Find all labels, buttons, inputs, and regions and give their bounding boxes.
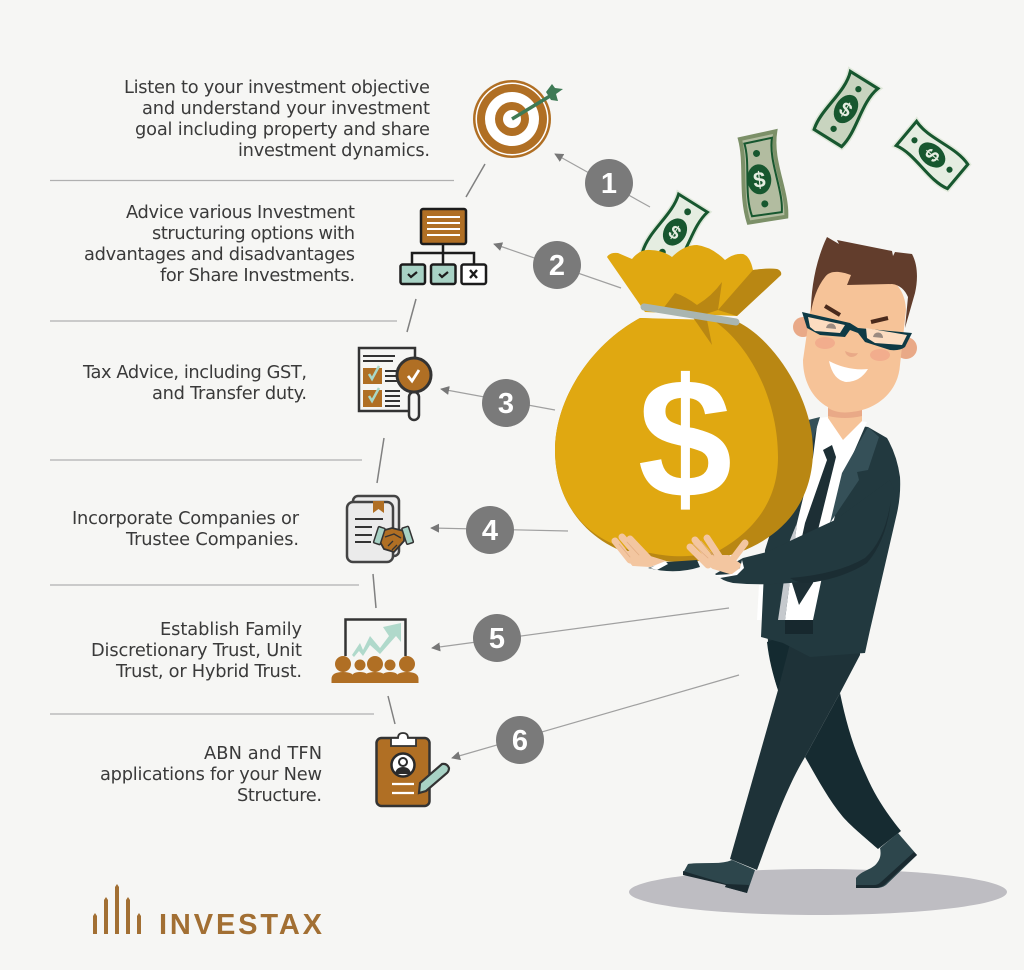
jacket — [761, 420, 900, 657]
bag lower fold shadow — [692, 316, 712, 345]
icon: clipboard with pencil — [376, 733, 449, 806]
text block 2 — [84, 202, 355, 286]
number badge 6 — [496, 716, 544, 764]
text block 6: Structure. — [237, 785, 322, 806]
flying banknote 3 — [813, 71, 879, 147]
right lapel — [830, 427, 879, 523]
flying banknote 3: $ — [835, 98, 856, 122]
shirt sliver — [757, 585, 765, 620]
eyebrows — [825, 306, 888, 322]
text block 1 — [124, 77, 430, 161]
arrow 6 — [452, 675, 739, 758]
text block 4: Incorporate Companies or — [72, 508, 300, 529]
icon: decision tree — [400, 209, 486, 284]
icon: target with arrow — [473, 80, 563, 158]
tie — [792, 445, 836, 605]
bag neck flare — [607, 245, 781, 316]
icon: checklist with magnifier — [359, 348, 431, 420]
flying banknote 2: $ — [752, 167, 767, 193]
nose — [845, 351, 858, 357]
flying banknote 1 — [641, 193, 709, 271]
illustration: money bag — [555, 245, 813, 562]
face — [803, 268, 906, 412]
back leg — [805, 693, 901, 849]
shirt — [785, 417, 867, 620]
number badge 6: 6 — [512, 725, 528, 757]
number badge 5: 5 — [489, 623, 505, 655]
number badge 4: 4 — [482, 515, 498, 547]
text block 2: structuring options with — [152, 223, 355, 244]
number badge 5 — [473, 614, 521, 662]
number badge 2: 2 — [549, 250, 565, 282]
text block 1: and understand your investment — [142, 98, 430, 119]
dollar sign: $ — [638, 344, 732, 534]
logo: Investax — [93, 884, 323, 941]
right hand — [690, 538, 745, 574]
text block 3: Tax Advice, including GST, — [82, 362, 307, 383]
number badge 1: 1 — [601, 168, 617, 200]
illustration: ground shadow — [629, 869, 1007, 915]
arrow 4 — [431, 528, 568, 531]
bag rope — [644, 307, 736, 322]
text block 4: Trustee Companies. — [125, 529, 299, 550]
right cuff — [715, 560, 744, 578]
text block 6 — [100, 743, 322, 806]
right arm — [715, 480, 897, 584]
text block 6: ABN and TFN — [204, 743, 322, 764]
text block 1: Listen to your investment objective — [124, 77, 430, 98]
flying banknote 2 — [738, 131, 787, 223]
illustration: businessman — [683, 237, 917, 893]
flying banknote 1: $ — [665, 221, 685, 244]
text block 4 — [72, 508, 300, 550]
eyes — [826, 323, 836, 329]
text block 1: goal including property and share — [135, 119, 430, 140]
text block 5 — [91, 619, 302, 682]
bag centre fold shadow — [662, 282, 722, 316]
ears — [793, 317, 813, 337]
glasses — [802, 312, 912, 350]
smile — [829, 361, 868, 382]
number badge 3: 3 — [498, 388, 514, 420]
bag front — [555, 318, 778, 556]
icon: audience and growth chart — [332, 620, 418, 683]
text block 1: investment dynamics. — [238, 140, 430, 161]
left hand — [615, 537, 663, 566]
hair — [811, 237, 917, 328]
text block 2: advantages and disadvantages — [84, 244, 355, 265]
text block 2: for Share Investments. — [160, 265, 355, 286]
number badge 4 — [466, 506, 514, 554]
back shoe — [856, 833, 917, 888]
neck — [828, 405, 862, 440]
logo: Investax: INVESTAX — [159, 909, 323, 941]
cheeks — [815, 337, 835, 349]
arrow 5 — [432, 608, 729, 648]
text block 5: Discretionary Trust, Unit — [91, 640, 302, 661]
arrow 3 — [441, 389, 555, 410]
number badge 3 — [482, 379, 530, 427]
text block 6: applications for your New — [100, 764, 322, 785]
icon: documents and handshake — [347, 496, 414, 562]
number badge 1 — [585, 159, 633, 207]
flying banknote 4: $ — [921, 144, 945, 167]
left lapel — [808, 417, 820, 440]
bag shadow side — [555, 318, 813, 562]
front leg — [730, 630, 860, 870]
left cuff — [650, 561, 668, 570]
number badge 2 — [533, 241, 581, 289]
text block 3 — [82, 362, 307, 404]
arrow 2 — [494, 244, 621, 288]
arrow 1 — [555, 154, 650, 207]
text block 5: Establish Family — [160, 619, 302, 640]
text block 5: Trust, or Hybrid Trust. — [115, 661, 302, 682]
front shoe — [683, 860, 755, 893]
flying banknote 4 — [895, 120, 969, 190]
bag flap shadow — [718, 269, 781, 316]
illustration: arms and hands — [615, 480, 897, 584]
text block 3: and Transfer duty. — [152, 383, 307, 404]
text block 2: Advice various Investment — [126, 202, 355, 223]
left sleeve — [648, 560, 700, 571]
